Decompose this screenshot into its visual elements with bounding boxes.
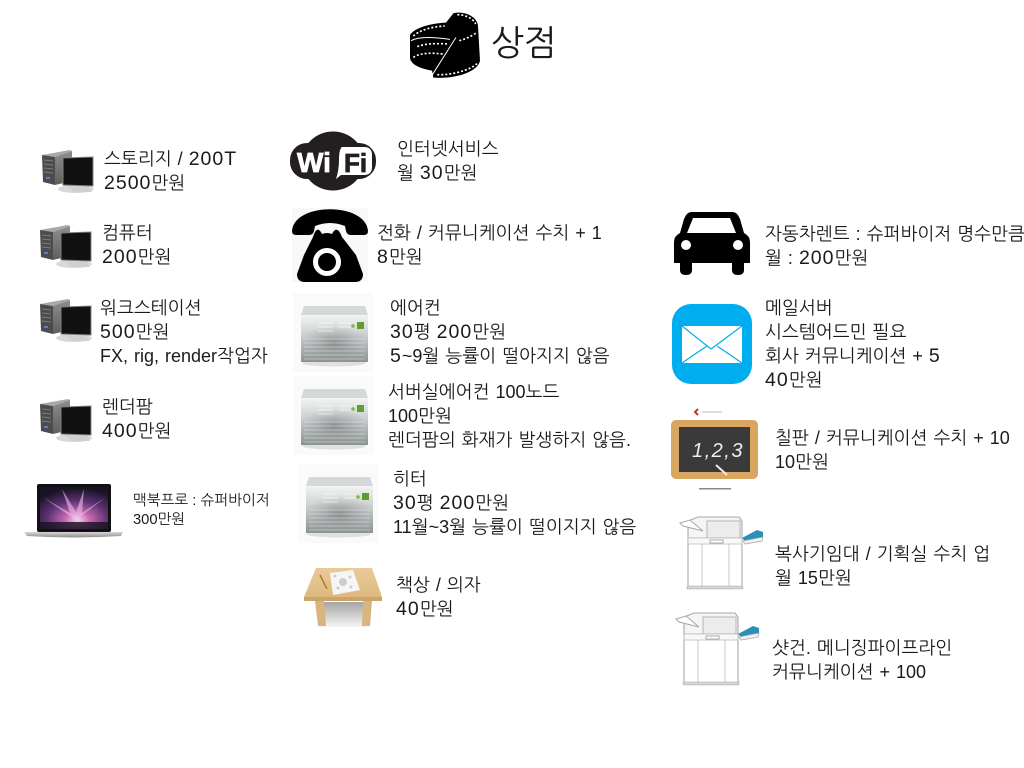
text: 커뮤니케이션 + 100: [772, 662, 926, 682]
item: chalkboard: [671, 409, 1010, 490]
text: 월 15만원: [775, 568, 852, 588]
text: 5: [390, 345, 402, 367]
icon: copier: [680, 517, 763, 589]
text: 30만원: [420, 162, 477, 184]
text: 렌더팜: [102, 397, 153, 417]
text: 자동차렌트 : 슈퍼바이저 명수만큼: [765, 224, 1024, 244]
icon: computer: [42, 150, 94, 193]
text: 만원: [789, 370, 823, 390]
title: [410, 13, 557, 78]
item: render farm: [40, 397, 171, 442]
item: shotgun: [676, 613, 952, 685]
text: 40: [396, 598, 420, 620]
text: 500: [100, 321, 136, 343]
icon: wifi: Wi: [297, 147, 331, 178]
text: 만원: [389, 247, 423, 267]
icon: chalkboard: [671, 409, 758, 490]
icon: laptop: [24, 484, 123, 538]
text: 메일서버: [765, 298, 833, 318]
item: air conditioner: [293, 293, 610, 372]
icon: desk: [304, 568, 382, 627]
text: 만원: [138, 247, 171, 267]
icon: heater: [298, 464, 379, 543]
icon: telephone: [292, 208, 368, 282]
text: 월: [397, 163, 420, 183]
text: 100만원: [388, 406, 452, 426]
icon: mail: [672, 304, 752, 384]
text: 2500: [104, 172, 151, 194]
text: 서버실에어컨 100노드: [388, 382, 559, 402]
text: 200: [102, 246, 138, 268]
text: 5: [929, 345, 941, 367]
icon: copier: [676, 613, 759, 685]
text: 40: [765, 369, 789, 391]
text: 만원: [136, 322, 169, 342]
item: storage: [42, 148, 237, 194]
item: server room air conditioner: [293, 376, 631, 455]
text: 400: [102, 420, 138, 442]
text: 복사기임대 / 기획실 수치 업: [775, 544, 990, 564]
text: 인터넷서비스: [397, 139, 499, 159]
item: car rental: [674, 212, 1024, 275]
text: FX, rig, render작업자: [100, 346, 268, 366]
text: 에어컨: [390, 298, 441, 318]
text: 히터: [393, 469, 427, 489]
item: workstation: [40, 298, 268, 366]
icon: computer: [40, 299, 92, 342]
item: mail server: [672, 298, 941, 391]
icon: computer: [40, 399, 92, 442]
heading: 상점: [491, 24, 557, 63]
text: 8: [377, 246, 389, 268]
icon: wifi: [290, 132, 376, 190]
text: 30: [393, 492, 417, 514]
text: 11월~3월 능률이 떨이지지 않음: [393, 517, 636, 537]
item: macbook pro: [24, 484, 270, 538]
text: 만원: [420, 599, 454, 619]
icon: air conditioner: [293, 293, 374, 372]
text: 만원: [138, 421, 171, 441]
text: 월 :: [765, 248, 799, 268]
text: 평 200만원: [414, 321, 506, 343]
text: 컴퓨터: [102, 223, 153, 243]
icon: car: [674, 212, 750, 275]
icon: chalkboard: 1,2,3: [692, 440, 744, 462]
text: 샷건. 메니징파이프라인: [772, 638, 952, 658]
text: 200만원: [799, 247, 868, 269]
item: phone: [292, 208, 602, 282]
text: 평 200만원: [417, 492, 509, 514]
text: 워크스테이션: [100, 298, 202, 318]
text: 칠판 / 커뮤니케이션 수치 + 10: [775, 428, 1010, 448]
text: 10만원: [775, 452, 829, 472]
item: computer: [40, 223, 171, 268]
text: 만원: [151, 173, 185, 193]
text: 300만원: [133, 511, 185, 528]
item: desk: [304, 568, 481, 627]
text: 회사 커뮤니케이션 +: [765, 346, 929, 366]
text: ~9월 능률이 떨아지지 않음: [402, 346, 610, 366]
item: internet: [290, 132, 499, 190]
icon: air conditioner: [293, 376, 374, 455]
text: 렌더팜의 화재가 발생하지 않음.: [388, 430, 631, 450]
icon: film reel: [410, 13, 480, 78]
item: copier rental: [680, 517, 990, 589]
text: 스토리지 / 200T: [104, 148, 237, 170]
text: 30: [390, 321, 414, 343]
icon: wifi: Fi: [344, 148, 367, 178]
item: heater: [298, 464, 636, 543]
icon: computer: [40, 225, 92, 268]
text: 책상 / 의자: [396, 575, 481, 595]
text: 전화 / 커뮤니케이션 수치 + 1: [377, 223, 602, 243]
text: 맥북프로 : 슈퍼바이저: [133, 493, 270, 509]
text: 시스템어드민 필요: [765, 322, 906, 342]
